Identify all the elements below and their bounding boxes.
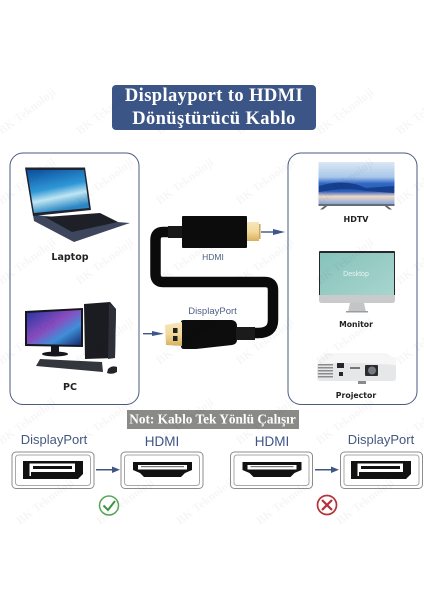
watermark pattern: BK Teknoloji xyxy=(13,475,77,527)
label: HDTV: HDTV xyxy=(344,215,369,224)
arrow: HDMI out xyxy=(261,229,285,235)
connector: HDMI plug xyxy=(168,216,260,248)
label: PC: PC xyxy=(63,382,77,393)
port: DisplayPort target xyxy=(340,452,422,488)
diagram: wrong direction xyxy=(230,432,422,514)
watermark pattern: BK Teknoloji xyxy=(233,85,297,137)
arrow: DisplayPort in xyxy=(143,331,164,336)
icon: monitor: Desktop xyxy=(343,271,369,278)
panel: output devices xyxy=(288,153,417,404)
watermark pattern: BK Teknoloji xyxy=(253,475,317,527)
watermark pattern: BK Teknoloji xyxy=(73,315,137,367)
watermark pattern: BK Teknoloji xyxy=(313,155,377,207)
label: laptop: Laptop xyxy=(51,252,89,263)
icon: green check xyxy=(100,496,118,515)
watermark pattern: BK Teknoloji xyxy=(153,85,217,137)
watermark pattern: BK Teknoloji xyxy=(153,395,217,447)
watermark pattern: BK Teknoloji xyxy=(93,475,157,527)
label: DisplayPort target: DisplayPort xyxy=(348,432,415,447)
icon: red cross xyxy=(318,496,336,514)
label: DisplayPort cable end: DisplayPort xyxy=(188,306,237,317)
watermark pattern: BK Teknoloji xyxy=(233,315,297,367)
watermark pattern: BK Teknoloji xyxy=(333,475,397,527)
icon: desktop PC xyxy=(25,302,117,374)
title banner: Dönüştürücü Kablo xyxy=(132,109,296,129)
watermark pattern: BK Teknoloji xyxy=(313,235,377,287)
label: HDMI source: HDMI xyxy=(255,434,289,449)
watermark pattern: BK Teknoloji xyxy=(73,235,137,287)
watermark pattern: BK Teknoloji xyxy=(153,235,217,287)
title banner: Displayport to HDMI xyxy=(125,86,303,106)
watermark pattern: BK Teknoloji xyxy=(73,395,137,447)
connector: DisplayPort plug xyxy=(165,320,255,349)
cable: black cord xyxy=(156,232,273,333)
watermark pattern: BK Teknoloji xyxy=(173,475,237,527)
icon: monitor xyxy=(319,251,395,312)
label: DisplayPort source: DisplayPort xyxy=(21,432,88,447)
note banner: Not: Kablo Tek Yönlü Çalışır xyxy=(129,412,296,427)
watermark pattern: BK Teknoloji xyxy=(313,315,377,367)
watermark pattern: BK Teknoloji xyxy=(153,155,217,207)
label: projector: Projector xyxy=(336,391,376,400)
port: HDMI xyxy=(121,452,203,488)
watermark pattern: BK Teknoloji xyxy=(233,235,297,287)
icon: laptop xyxy=(25,168,130,242)
watermark pattern: BK Teknoloji xyxy=(313,395,377,447)
diagram: correct direction xyxy=(12,432,203,515)
label: monitor: Monitor xyxy=(339,320,373,329)
port: HDMI source xyxy=(230,452,312,488)
watermark pattern: BK Teknoloji xyxy=(73,155,137,207)
label: HDMI cable end: HDMI xyxy=(202,252,224,262)
watermark pattern: BK Teknoloji xyxy=(233,155,297,207)
watermark pattern: BK Teknoloji xyxy=(73,85,137,137)
arrow: HDMI to DP xyxy=(315,466,339,473)
arrow: DP to HDMI xyxy=(96,466,120,473)
watermark pattern: BK Teknoloji xyxy=(153,315,217,367)
watermark pattern xyxy=(0,85,424,527)
icon: HDTV xyxy=(318,162,394,210)
watermark pattern: BK Teknoloji xyxy=(233,395,297,447)
title banner xyxy=(112,85,316,130)
port: DisplayPort xyxy=(12,452,94,488)
icon: projector xyxy=(317,353,396,384)
watermark pattern: BK Teknoloji xyxy=(313,85,377,137)
panel: source devices xyxy=(10,153,139,404)
label: HDMI target: HDMI xyxy=(145,434,179,449)
